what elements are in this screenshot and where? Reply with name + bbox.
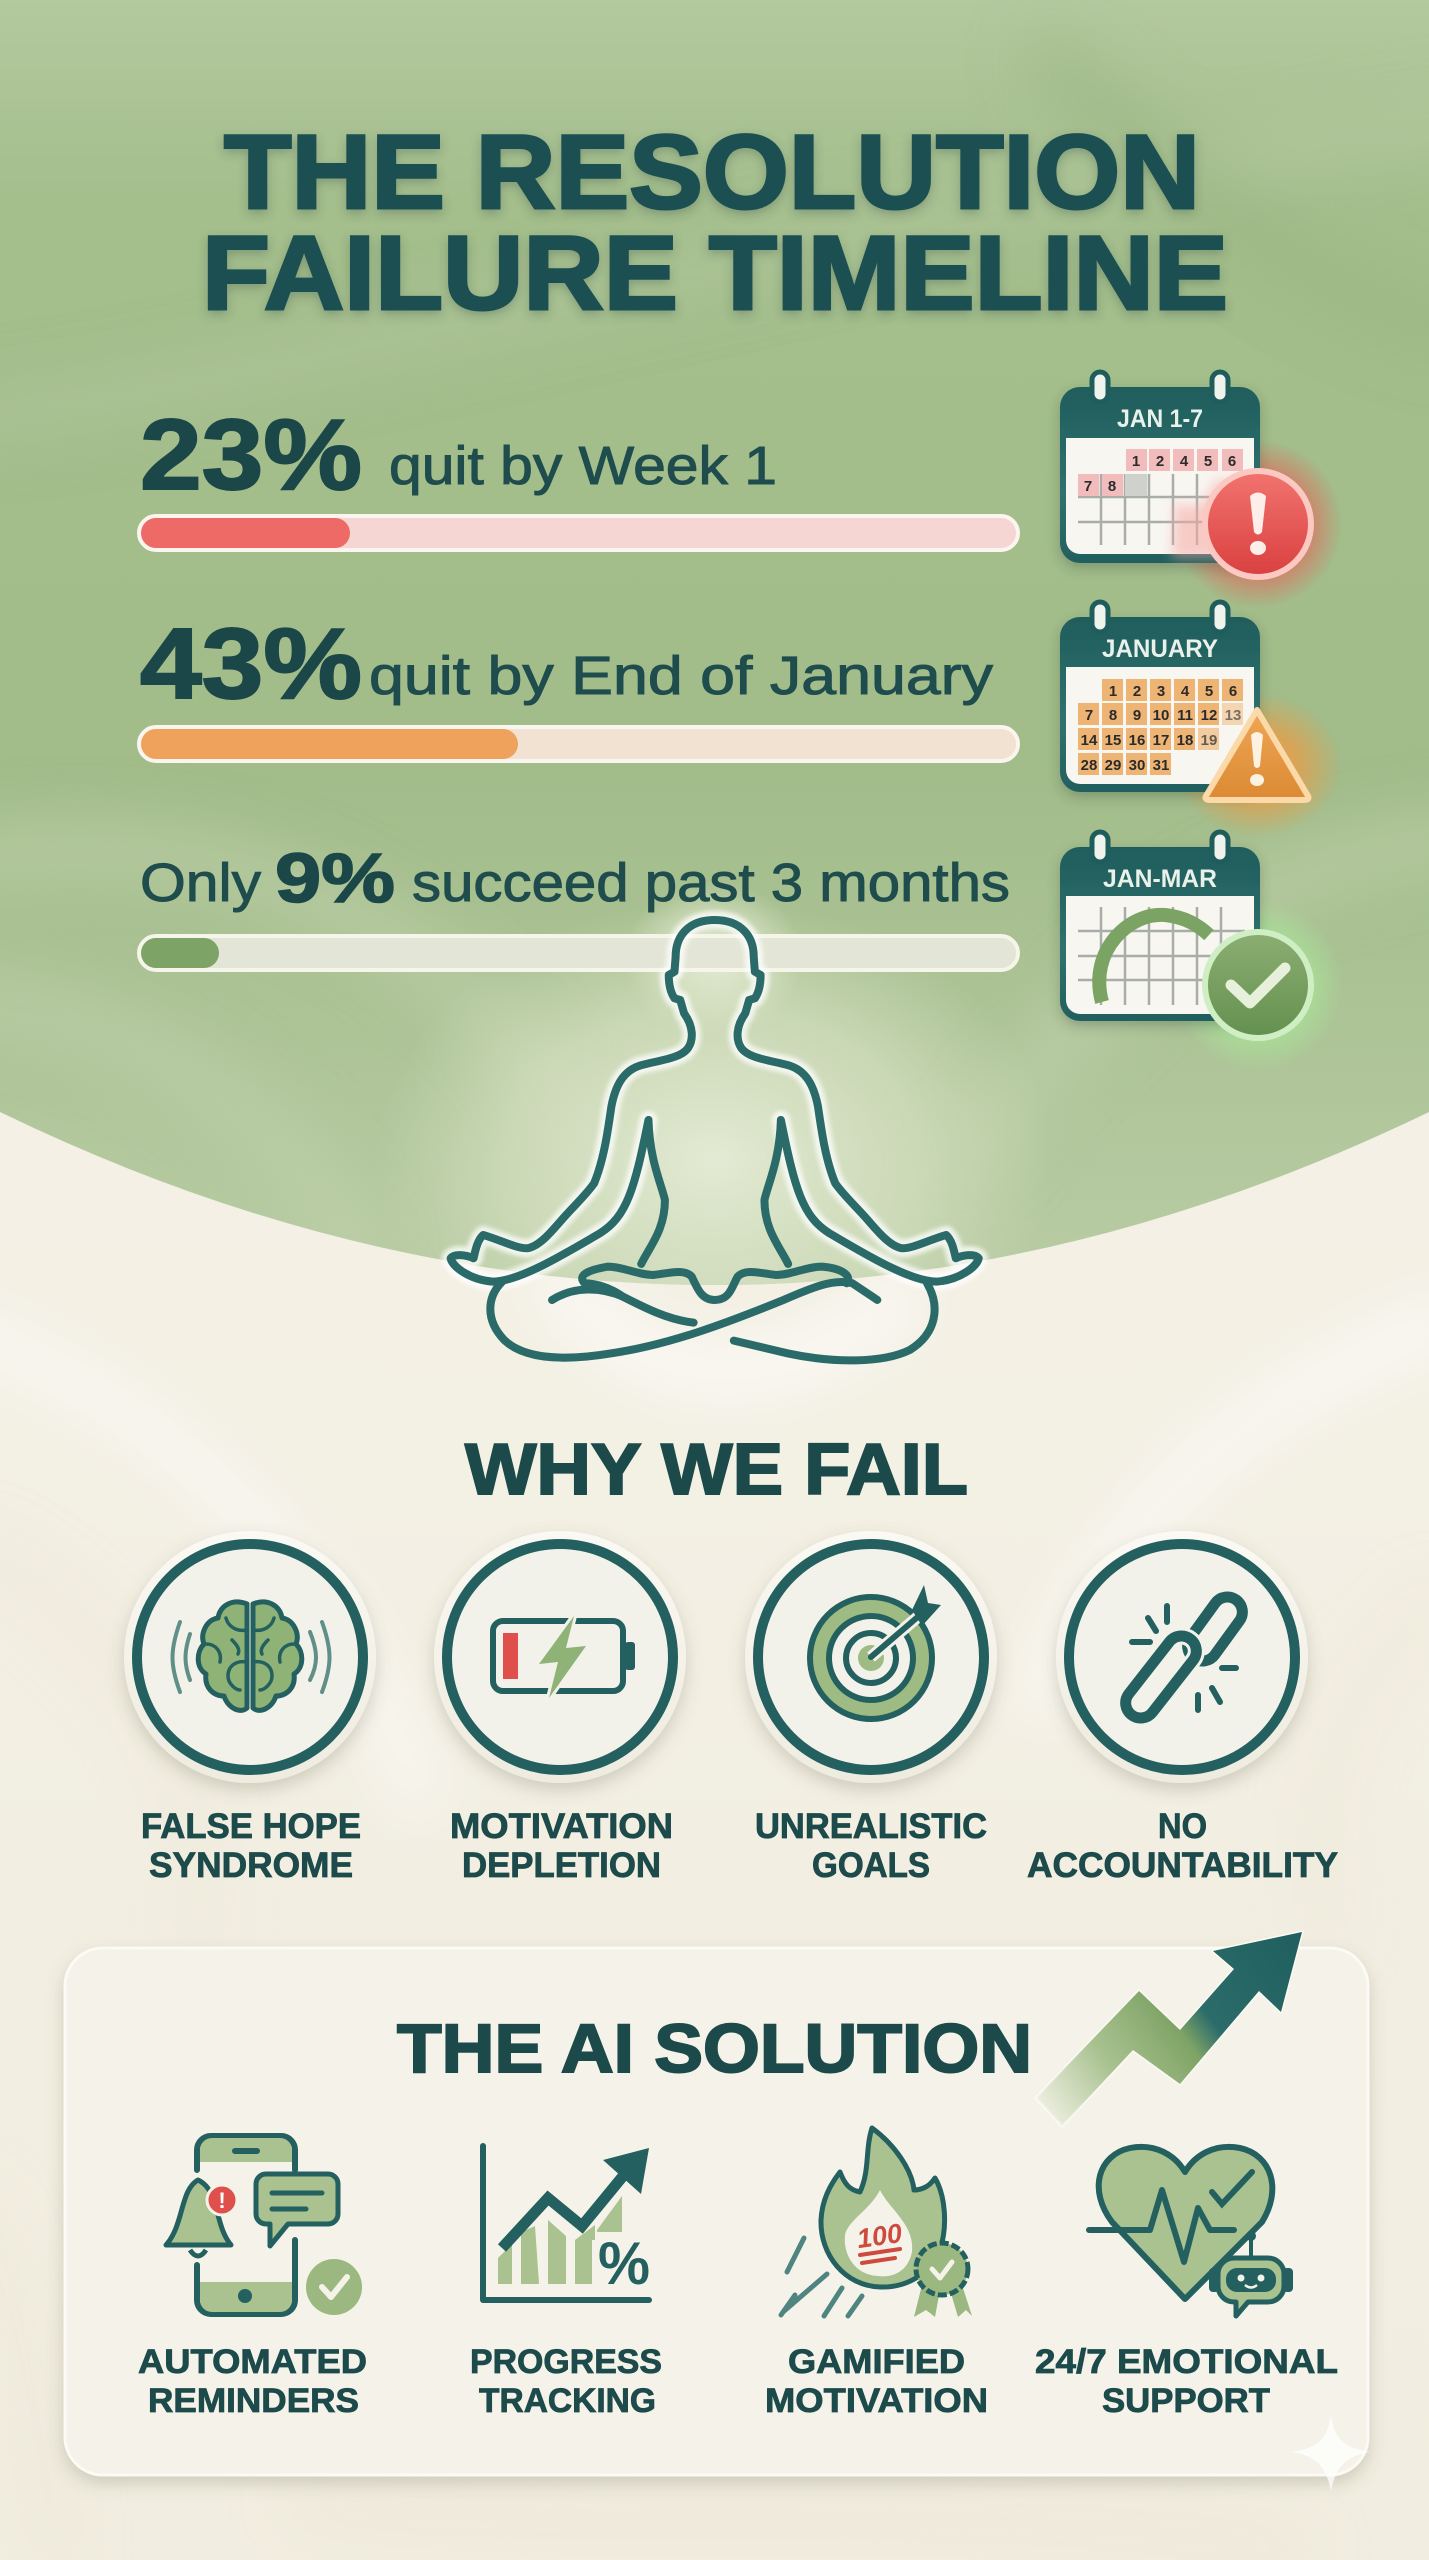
icon: calendar January with warning: 30 [1129, 757, 1145, 774]
stat row: only 9% succeed past 3 months: succeed past 3 months [412, 853, 1010, 913]
stat row: 43% quit by end of January [139, 608, 1018, 761]
item: unrealistic goals [745, 1531, 997, 1885]
icon: progress chart [483, 2146, 650, 2300]
icon: calendar Jan 1-7 with alert: 4 [1180, 453, 1189, 470]
icon: calendar January with warning: 17 [1153, 732, 1169, 749]
icon: phone with reminders [166, 2136, 362, 2315]
panel: the AI solution: SUPPORT [1102, 2382, 1270, 2420]
panel: the AI solution: TRACKING [479, 2382, 656, 2420]
panel: the AI solution: REMINDERS [148, 2382, 359, 2420]
heading: the AI solution: THE AI SOLUTION [397, 2010, 1032, 2087]
icon: flame with 100 and medal [781, 2128, 972, 2317]
icon: calendar January with warning: 13 [1225, 707, 1241, 724]
panel: the AI solution [65, 1932, 1370, 2492]
figure: meditating person outline [451, 920, 979, 1360]
icon: calendar January with warning: 10 [1153, 707, 1169, 724]
stat row: only 9% succeed past 3 months: Only [140, 853, 261, 913]
bell [166, 2180, 231, 2245]
icon: calendar January with warning: 18 [1177, 732, 1193, 749]
item: motivation depletion [434, 1531, 686, 1885]
icon: calendar Jan 1-7 with alert: 8 [1108, 478, 1116, 495]
icon: calendar January with warning [1060, 602, 1342, 837]
icon: calendar Jan 1-7 with alert: 6 [1228, 453, 1236, 470]
background [0, 0, 1429, 1777]
panel: the AI solution: AUTOMATED [138, 2343, 367, 2381]
icon: calendar January with warning: 9 [1133, 707, 1141, 724]
icon: flame with 100 and medal: 100 [855, 2218, 904, 2254]
item: motivation depletion: MOTIVATION [450, 1807, 673, 1846]
icon: target with arrow [810, 1585, 941, 1719]
stat row: only 9% succeed past 3 months: 9% [275, 839, 395, 917]
panel: the AI solution: PROGRESS [470, 2343, 662, 2381]
icon: calendar January with warning: 15 [1105, 732, 1121, 749]
panel: the AI solution: MOTIVATION [765, 2382, 988, 2420]
icon: calendar January with warning: 28 [1081, 757, 1097, 774]
icon: progress chart: % [598, 2230, 650, 2297]
icon: broken chain link [1120, 1591, 1248, 1724]
icon: calendar January with warning: 6 [1229, 683, 1237, 700]
title: THE RESOLUTION [224, 114, 1200, 231]
icon: calendar January with warning: 31 [1153, 757, 1169, 774]
icon: heart with pulse and robot [1089, 2147, 1293, 2316]
progress arc [1099, 915, 1209, 1002]
item: no accountability: NO [1158, 1807, 1207, 1846]
icon: calendar January with warning: 11 [1177, 707, 1193, 724]
icon: calendar Jan 1-7 with alert [1060, 372, 1342, 608]
item: false hope syndrome: FALSE HOPE [141, 1807, 361, 1846]
item: no accountability: ACCOUNTABILITY [1027, 1846, 1338, 1885]
item: motivation depletion: DEPLETION [462, 1846, 661, 1885]
stat row: 23% quit by week 1: 23% [140, 399, 362, 511]
icon: calendar January with warning: 29 [1105, 757, 1121, 774]
progress bar: 23% [139, 516, 1018, 550]
icon: calendar January with warning: 8 [1109, 707, 1117, 724]
stat row: 23% quit by week 1 [139, 399, 1018, 550]
alert badge [1205, 471, 1311, 577]
icon: battery [493, 1616, 635, 1698]
progress bar: 43% [139, 727, 1018, 761]
icon: calendar January with warning: 5 [1205, 683, 1213, 700]
icon: calendar January with warning: JANUARY [1102, 635, 1218, 663]
icon: calendar Jan 1-7 with alert: JAN 1-7 [1117, 405, 1203, 433]
icon: calendar Jan 1-7 with alert: 2 [1156, 453, 1164, 470]
panel: the AI solution: 24/7 EMOTIONAL [1035, 2343, 1338, 2381]
item: unrealistic goals: UNREALISTIC [755, 1807, 987, 1846]
icon: phone with reminders: ! [218, 2188, 226, 2213]
title [202, 114, 1228, 332]
check badge [1205, 932, 1311, 1038]
icon: calendar January with warning: 16 [1129, 732, 1145, 749]
arrow: rising trend [1036, 1932, 1302, 2126]
speech bubble [256, 2174, 338, 2246]
title: FAILURE TIMELINE [202, 215, 1228, 332]
icon: calendar January with warning: 7 [1085, 707, 1093, 724]
stat row: 43% quit by end of January: quit by End of January [369, 646, 993, 706]
stat row: 43% quit by end of January: 43% [140, 608, 362, 720]
icon: calendar January with warning: 19 [1201, 732, 1217, 749]
progress bar: 9% [139, 936, 1018, 970]
icon: sparkle [1292, 2416, 1370, 2492]
item: false hope syndrome: SYNDROME [149, 1846, 353, 1885]
icon: calendar Jan-Mar with check: JAN-MAR [1103, 865, 1217, 893]
icon: calendar January with warning: 1 [1109, 683, 1117, 700]
icon: calendar January with warning: 14 [1081, 732, 1098, 749]
icon: brain [172, 1602, 330, 1710]
item: false hope syndrome [124, 1531, 376, 1885]
icon: calendar Jan 1-7 with alert: 7 [1084, 478, 1092, 495]
icon: calendar January with warning: 12 [1201, 707, 1217, 724]
icon: calendar January with warning: 4 [1181, 683, 1190, 700]
icon: calendar Jan 1-7 with alert: 5 [1204, 453, 1212, 470]
item: unrealistic goals: GOALS [812, 1846, 930, 1885]
item: no accountability [1027, 1531, 1338, 1885]
icon: calendar January with warning: 3 [1157, 683, 1165, 700]
panel: the AI solution: GAMIFIED [788, 2343, 965, 2381]
stat row: 23% quit by week 1: quit by Week 1 [389, 436, 777, 496]
icon: calendar Jan-Mar with check [1060, 832, 1344, 1071]
figure glow [451, 920, 979, 1282]
warning badge [1206, 710, 1308, 800]
icon: calendar January with warning: 2 [1133, 683, 1141, 700]
stat row: only 9% succeed past 3 months [139, 839, 1018, 970]
icon: calendar Jan 1-7 with alert: 1 [1132, 453, 1140, 470]
heading: why we fail: WHY WE FAIL [465, 1430, 968, 1510]
